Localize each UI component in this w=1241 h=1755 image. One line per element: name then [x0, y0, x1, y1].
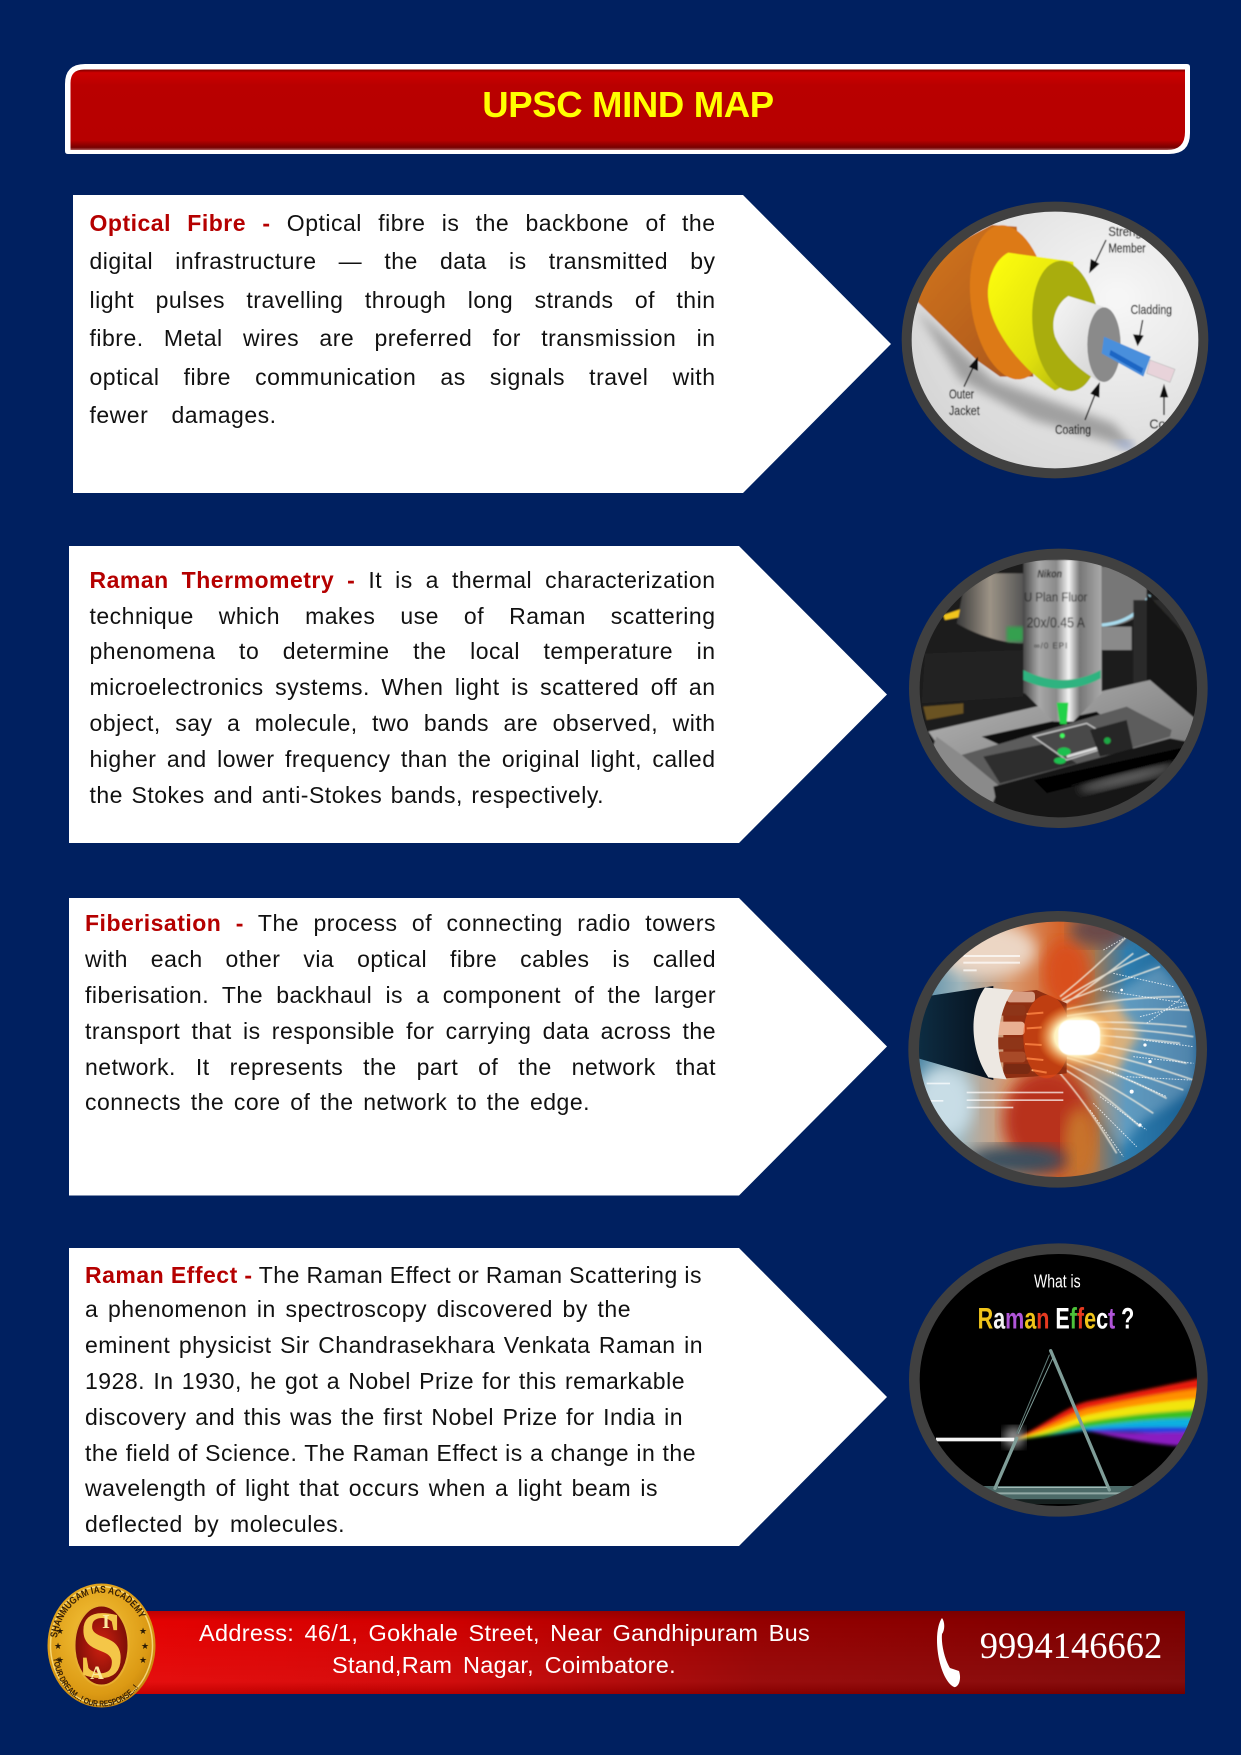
title banner — [65, 64, 1190, 154]
beam — [1003, 1427, 1025, 1448]
panel: raman effect: discovery and this was the first Nobel Prize for India in — [85, 1404, 683, 1430]
icon: raman effect prism image: Raman Effect ? — [978, 1303, 1134, 1336]
panel: raman effect: eminent physicist Sir Chandrasekhara Venkata Raman in — [85, 1332, 703, 1358]
icon: academy logo: A — [90, 1663, 104, 1684]
arrows and labels — [964, 240, 1167, 420]
icon: microscope objective photo: ∞/0 EPI — [1034, 641, 1067, 650]
stage — [928, 679, 1194, 760]
icon: optical fibre cross-section photo: Outer — [949, 388, 974, 402]
icon: microscope objective photo: 20x/0.45 A — [1027, 616, 1085, 632]
panel: raman thermometry: microelectronics systems. When light is scattered off an — [90, 674, 716, 700]
panel: fiberisation: Fiberisation - The process of connecting radio towers — [85, 910, 716, 936]
address text — [199, 1620, 810, 1678]
icon: academy logo: ★ — [56, 1626, 64, 1636]
white band — [973, 987, 1013, 1079]
phone number: 9994146662 — [980, 1625, 1162, 1666]
panel: fiberisation: network. It represents the part of the network that — [85, 1054, 716, 1080]
panel: raman thermometry: phenomena to determine the local temperature in — [90, 638, 716, 664]
panel: raman thermometry: technique which makes use of Raman scattering — [90, 602, 716, 628]
left lens — [957, 573, 1023, 643]
icon: microscope objective photo: Nikon — [1037, 568, 1062, 580]
icon: academy logo: ★ — [141, 1641, 149, 1651]
panel: optical fibre: fewer damages. — [90, 402, 276, 428]
blue cladding and core — [1147, 360, 1175, 382]
panel: optical fibre — [73, 195, 891, 493]
cable sheath — [919, 986, 994, 1080]
orange jacket — [918, 224, 1034, 378]
icon: academy logo: ★ — [139, 1626, 147, 1636]
panel: fiberisation: with each other via optical fibre cables is called — [85, 946, 716, 972]
panel: fiberisation: fiberisation. The backhaul is a component of the larger — [85, 982, 716, 1008]
address text: Address: 46/1, Gokhale Street, Near Gandhipuram Bus — [199, 1620, 810, 1646]
icon: academy logo: ★ — [56, 1655, 64, 1665]
icon: academy logo: ★ — [139, 1655, 147, 1665]
rainbow — [1015, 1378, 1200, 1447]
fan glow — [1060, 963, 1197, 1150]
icon: academy logo: ★ — [54, 1641, 62, 1651]
icon: optical fibre cross-section photo: Streng — [1108, 225, 1142, 239]
panel: optical fibre: optical fibre communication as signals travel with — [90, 364, 716, 390]
icon: optical fibre cross-section photo: Co — [1149, 417, 1166, 431]
icon: optical fibre cross-section photo: Coating — [1055, 423, 1091, 437]
prism — [983, 1351, 1127, 1493]
panel: fiberisation — [69, 898, 887, 1196]
panel: raman thermometry: Raman Thermometry - It is a thermal characterization — [90, 567, 716, 593]
heading text: UPSC MIND MAP — [482, 84, 774, 125]
icon: microscope objective photo: U Plan Fluor — [1024, 590, 1087, 604]
panel: raman effect: wavelength of light that occurs when a light beam is — [85, 1475, 658, 1501]
address text: Stand,Ram Nagar, Coimbatore. — [332, 1652, 676, 1678]
icon: optical fibre cross-section photo: Cladding — [1131, 303, 1172, 317]
icon: microscope objective photo — [909, 548, 1208, 828]
white coating — [1052, 295, 1103, 381]
panel: raman thermometry: object, say a molecule, two bands are observed, with — [90, 710, 716, 736]
light flare — [1037, 1003, 1117, 1070]
panel: raman effect: 1928. In 1930, he got a Nobel Prize for this remarkable — [85, 1368, 685, 1394]
right lens — [1102, 567, 1147, 627]
icon: academy logo — [48, 1584, 156, 1708]
copper tubes — [1003, 990, 1067, 1078]
panel: optical fibre: Optical Fibre - Optical fibre is the backbone of the — [90, 210, 716, 236]
objective body — [1023, 560, 1102, 693]
icon: optical fibre cross-section photo: Jacket — [949, 404, 980, 418]
panel: raman thermometry: the Stokes and anti-Stokes bands, respectively. — [90, 782, 604, 808]
icon: raman effect prism image — [909, 1243, 1208, 1517]
yellow member — [987, 252, 1074, 392]
icon: optical fibre cross-section photo: Member — [1108, 242, 1146, 256]
icon: raman effect prism image: What is — [1034, 1270, 1081, 1291]
icon: academy logo: I — [102, 1611, 110, 1633]
panel: raman thermometry: higher and lower frequency than the original light, called — [90, 746, 716, 772]
green spots — [1060, 733, 1065, 738]
panel: optical fibre: fibre. Metal wires are preferred for transmission in — [90, 325, 716, 351]
icon: phone handset — [937, 1618, 960, 1688]
panel: optical fibre: digital infrastructure — the data is transmitted by — [90, 248, 716, 274]
panel: fiberisation: connects the core of the network to the edge. — [85, 1089, 590, 1115]
panel: raman effect: deflected by molecules. — [85, 1511, 345, 1537]
panel: raman effect: Raman Effect - The Raman Effect or Raman Scattering is — [85, 1262, 702, 1288]
panel: raman thermometry — [69, 546, 887, 843]
icon: optical fibre cross-section photo — [902, 202, 1208, 478]
icon: academy logo: S — [79, 1592, 124, 1699]
panel: optical fibre: light pulses travelling through long strands of thin — [90, 287, 716, 313]
panel: raman effect: a phenomenon in spectroscopy discovered by the — [85, 1296, 631, 1322]
icon: fibre cable photo — [908, 911, 1207, 1188]
panel: raman effect — [69, 1248, 887, 1546]
icon: academy logo: YOUR DREAM...! OUR RESPONSE...! — [54, 1658, 138, 1706]
icon: academy logo: SHANMUGAM IAS ACADEMY — [50, 1586, 146, 1638]
panel: raman effect: the field of Science. The Raman Effect is a change in the — [85, 1440, 696, 1466]
panel: fiberisation: transport that is responsible for carrying data across the — [85, 1018, 716, 1044]
footer bar — [118, 1611, 1185, 1694]
fibre strands — [1060, 937, 1193, 1153]
